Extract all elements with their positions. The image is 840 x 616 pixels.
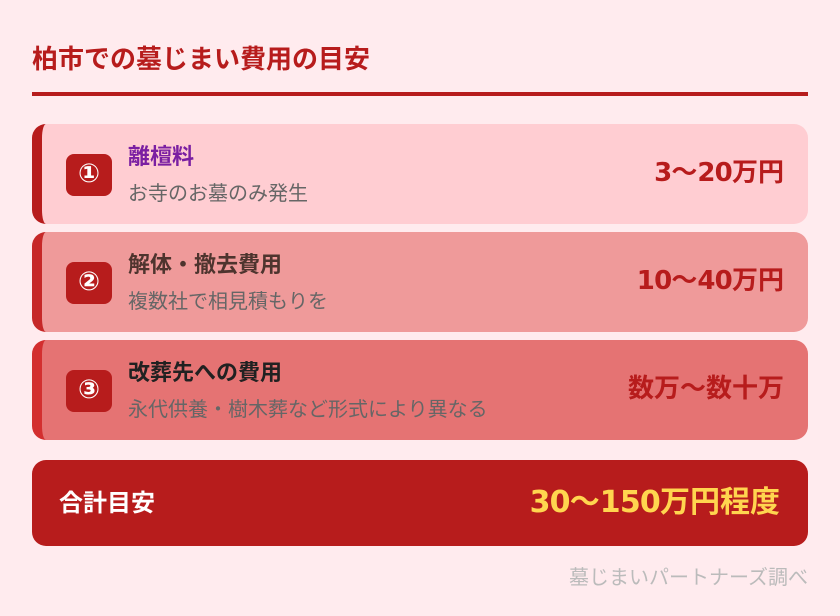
source note: 墓じまいパートナーズ調べ [569, 565, 808, 589]
item 2 amount: 10～40万円 [637, 266, 784, 296]
total label: 合計目安 [59, 489, 155, 517]
item 2 name: 解体・撤去費用 [128, 253, 282, 278]
item 1 description: お寺のお墓のみ発生 [128, 181, 308, 205]
total amount: 30～150万円程度 [530, 485, 780, 520]
badge 3 [66, 370, 112, 412]
item 1 amount: 3～20万円 [654, 158, 784, 188]
panel: item 3 [32, 340, 808, 440]
panel: item 2 [32, 232, 808, 332]
item 3 description: 永代供養・樹木葬など形式により異なる [128, 397, 488, 421]
title rule [32, 92, 808, 96]
item 3 amount: 数万～数十万 [628, 374, 784, 404]
panel: item 1 [32, 124, 808, 224]
item 2 description: 複数社で相見積もりを [128, 289, 328, 313]
badge 3: ③ [78, 375, 100, 405]
badge 2 [66, 262, 112, 304]
title: 柏市での墓じまい費用の目安 [32, 45, 370, 75]
badge 2: ② [78, 267, 100, 297]
item 3 name: 改葬先への費用 [128, 361, 282, 386]
item 1 name: 離檀料 [128, 145, 194, 170]
badge 1 [66, 154, 112, 196]
panel: total [32, 460, 808, 546]
badge 1: ① [78, 159, 100, 189]
